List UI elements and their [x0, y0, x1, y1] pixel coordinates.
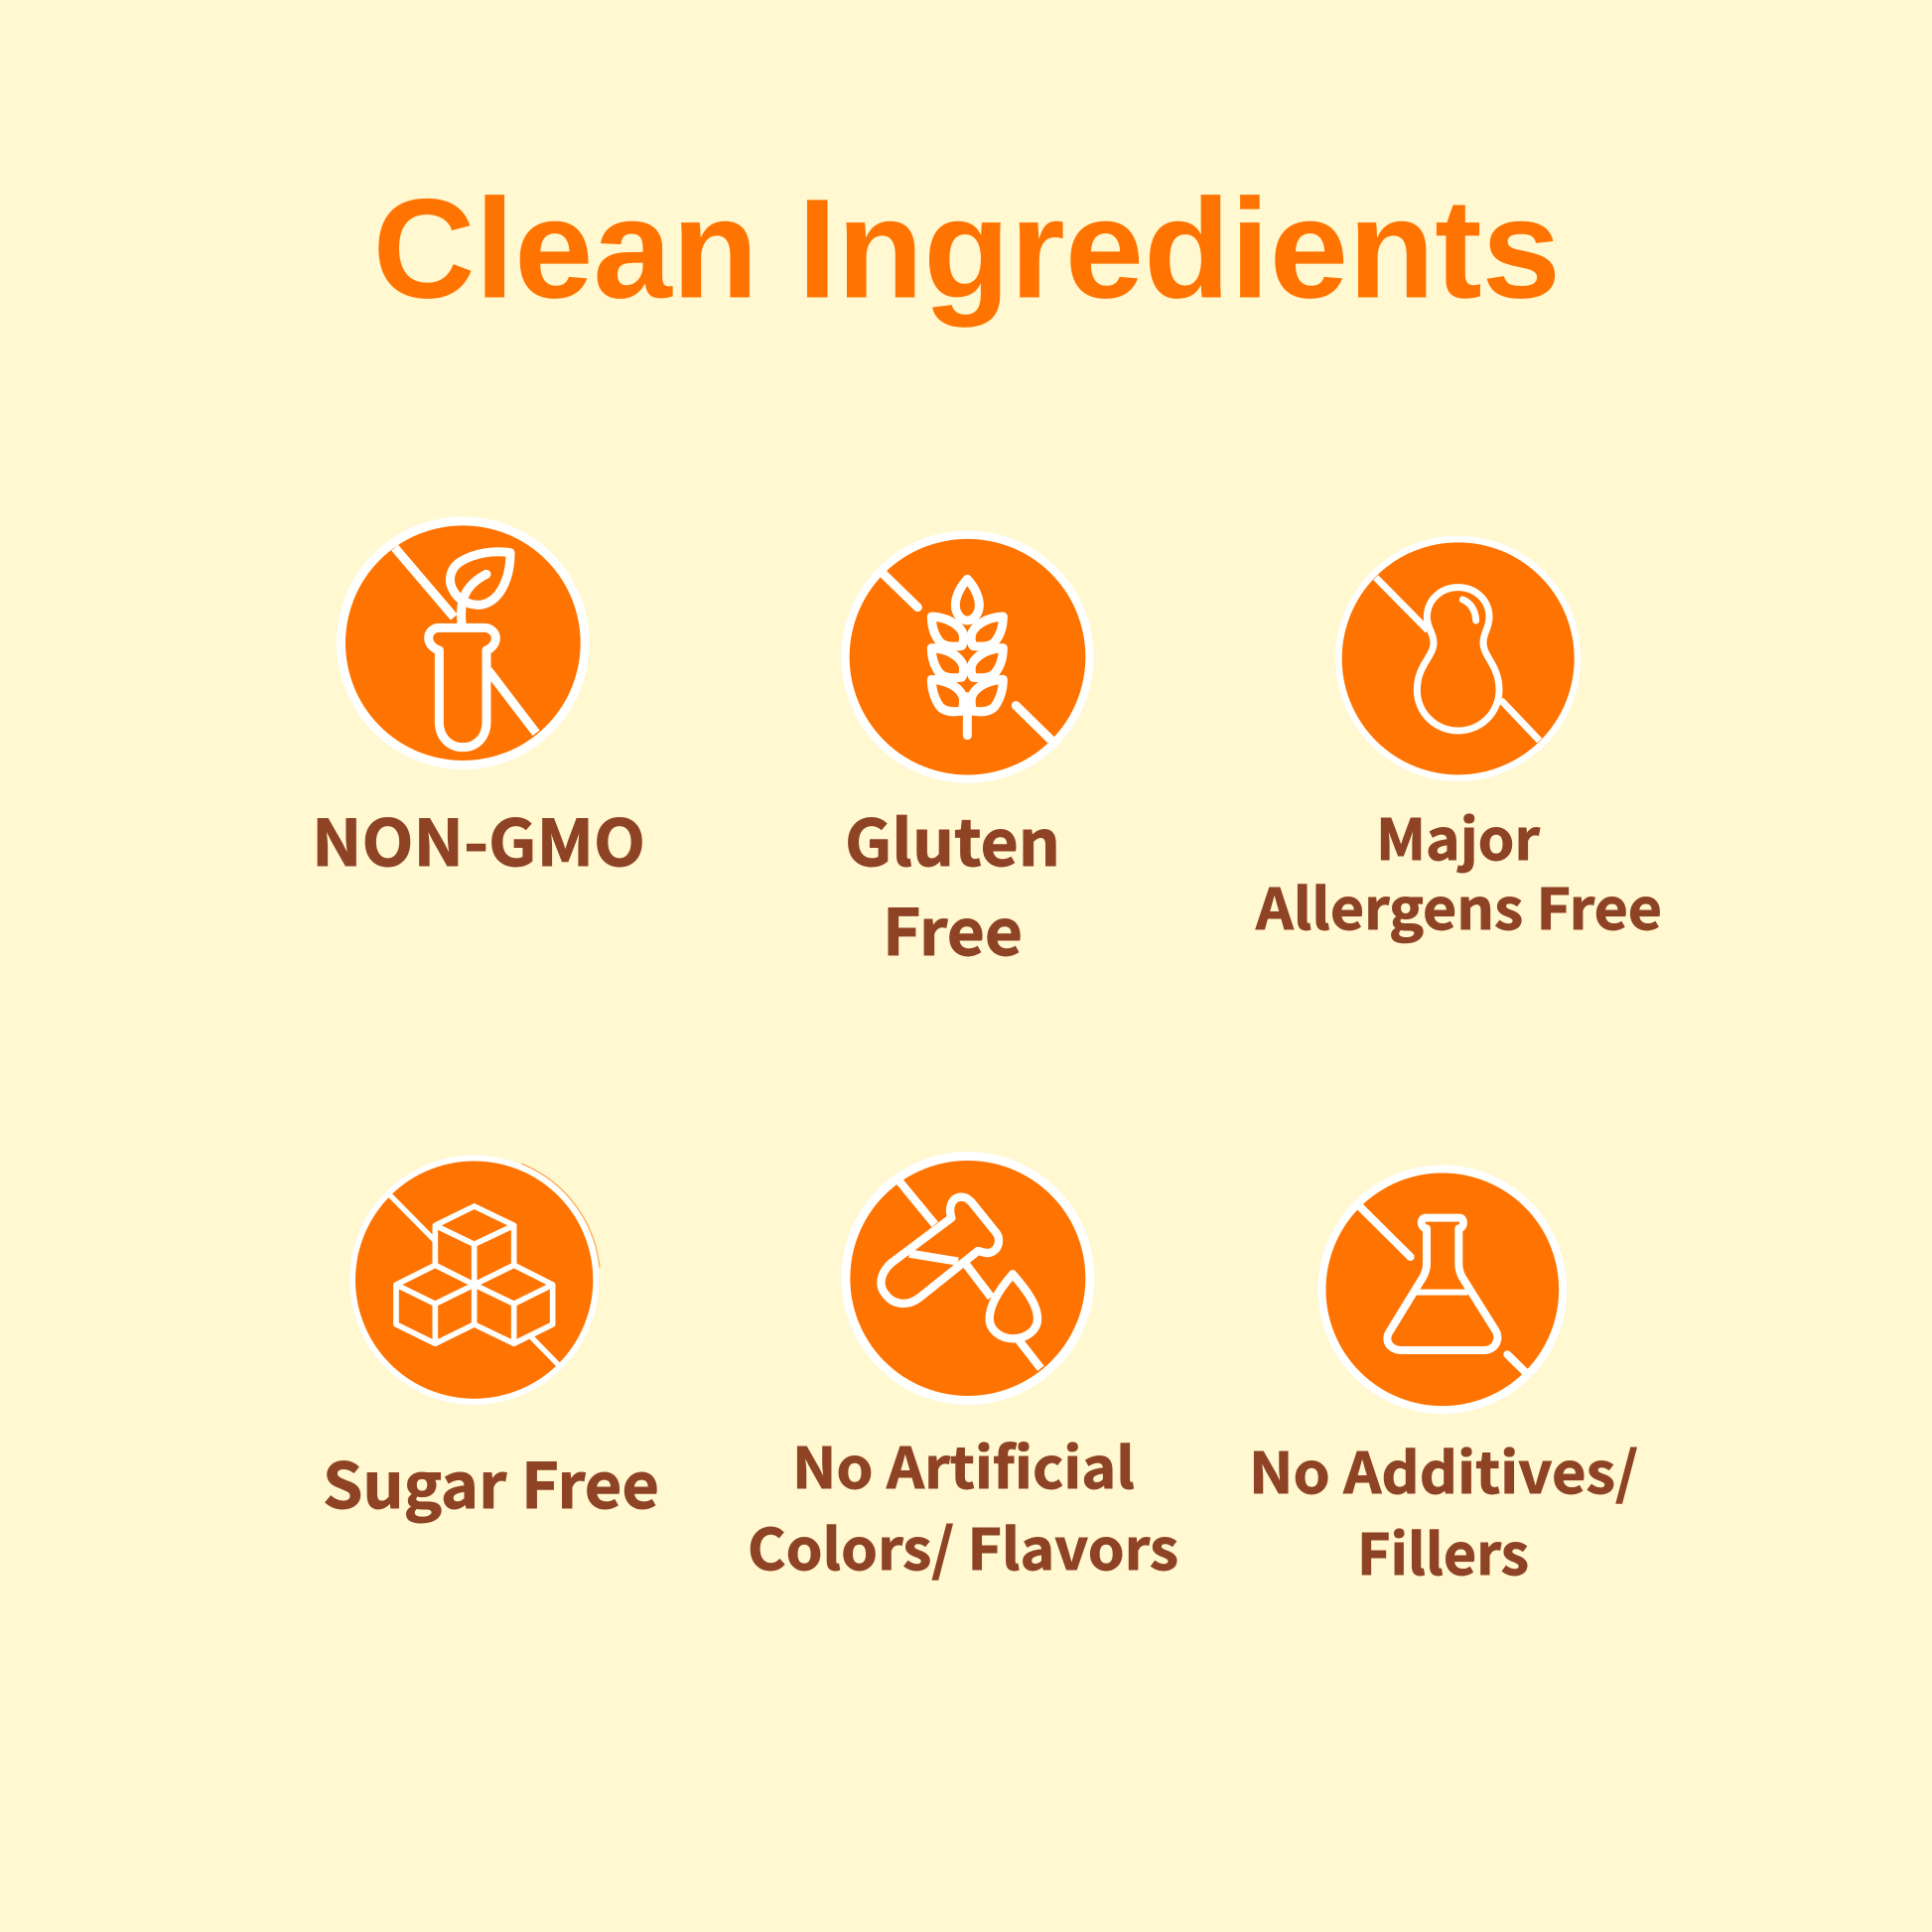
- label: No Additives/ Fillers: No Additives/: [1249, 1429, 1638, 1510]
- panel: NON-GMO: [312, 521, 645, 885]
- title: Clean Ingredients: [373, 171, 1561, 328]
- label: No Additives/ Fillers: Fillers: [1357, 1510, 1529, 1591]
- icon: sugar cubes, crossed out: [352, 1158, 600, 1402]
- label: No Additives/ Fillers: [1249, 1429, 1638, 1591]
- icon: tilted test tube with drop, crossed out: [846, 1156, 1090, 1400]
- label: Gluten Free: [845, 793, 1060, 974]
- label: Major Allergens Free: [1255, 795, 1662, 946]
- label: Gluten Free: Free: [883, 883, 1023, 974]
- label: No Artificial Colors/ Flavors: No Artificial: [792, 1424, 1135, 1505]
- icon: test tube with leaf, crossed out: [341, 521, 585, 764]
- panel: Gluten Free: [845, 535, 1089, 974]
- panel: Major Allergens Free: [1255, 539, 1662, 946]
- label: Major Allergens Free: Allergens Free: [1255, 865, 1662, 946]
- label: Sugar Free: Sugar Free: [323, 1437, 659, 1527]
- label: NON-GMO: NON-GMO: [312, 793, 645, 885]
- label: No Artificial Colors/ Flavors: [748, 1424, 1178, 1587]
- panel: No Artificial Colors/ Flavors: [748, 1156, 1178, 1587]
- panel: Sugar Free: [323, 1158, 659, 1527]
- icon: wheat, crossed out: [845, 535, 1089, 779]
- panel: No Additives/ Fillers: [1249, 1169, 1638, 1591]
- label: No Artificial Colors/ Flavors: Colors/ Flavors: [748, 1505, 1178, 1587]
- label: Gluten Free: Gluten: [845, 793, 1060, 885]
- icon: peanut, crossed out: [1338, 539, 1578, 778]
- icon: flask, crossed out: [1321, 1169, 1563, 1410]
- label: Major Allergens Free: Major: [1376, 795, 1540, 877]
